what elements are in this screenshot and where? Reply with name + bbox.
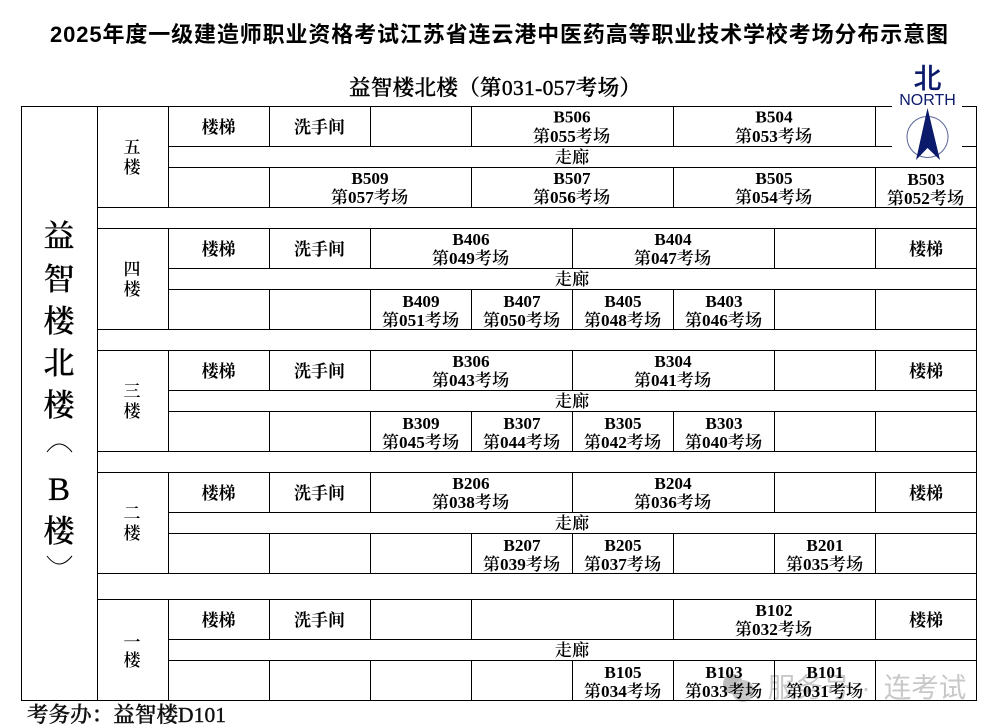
building name xyxy=(44,219,76,564)
room B307: 第044考场 xyxy=(483,433,560,452)
stairs: 楼梯 xyxy=(909,483,943,503)
room B101: B101 xyxy=(806,663,844,682)
panel: floor 2 xyxy=(98,472,976,574)
corridor: 走廊 xyxy=(555,641,589,660)
stairs: 楼梯 xyxy=(202,610,236,630)
building name: 楼 xyxy=(44,514,76,549)
room B304 xyxy=(634,352,711,390)
room B204: 第036考场 xyxy=(634,493,711,512)
room B309: 第045考场 xyxy=(382,433,459,452)
room B304: 第041考场 xyxy=(634,371,711,390)
floor label: 楼 xyxy=(124,650,142,670)
room B507: 第056考场 xyxy=(533,188,610,207)
room B303: B303 xyxy=(705,414,743,433)
room B305: B305 xyxy=(604,414,642,433)
panel: floor 1 xyxy=(98,600,976,701)
floor label xyxy=(124,504,142,543)
room B102 xyxy=(735,601,812,639)
corridor: 走廊 xyxy=(555,148,589,167)
building name: 智 xyxy=(44,262,74,297)
stairs: 楼梯 xyxy=(202,117,236,137)
stairs: 楼梯 xyxy=(202,361,236,381)
washroom: 洗手间 xyxy=(294,118,345,137)
stairs: 楼梯 xyxy=(909,610,943,630)
floor label xyxy=(124,138,142,177)
room B102: B102 xyxy=(755,601,793,620)
room B207: B207 xyxy=(503,536,541,555)
room B407: 第050考场 xyxy=(483,311,560,330)
panel: floor 3 xyxy=(98,350,976,452)
floor label: 二 xyxy=(124,504,140,523)
room B105 xyxy=(584,663,661,701)
building name: B xyxy=(48,472,70,508)
room B201: B201 xyxy=(806,536,844,555)
room B307 xyxy=(483,414,560,452)
room B307: B307 xyxy=(503,414,541,433)
room B409 xyxy=(382,292,459,330)
room B404: 第047考场 xyxy=(634,249,711,268)
room B406: 第049考场 xyxy=(432,249,509,268)
room B505: B505 xyxy=(755,169,793,188)
stairs: 楼梯 xyxy=(909,239,943,259)
room B103: 第033考场 xyxy=(685,682,762,701)
room B201 xyxy=(786,536,863,574)
floor label: 一 xyxy=(124,633,140,652)
room B509: 第057考场 xyxy=(331,188,408,207)
room B507: B507 xyxy=(553,169,591,188)
floor label: 楼 xyxy=(124,157,142,177)
room B509: B509 xyxy=(351,169,389,188)
room B206: 第038考场 xyxy=(432,493,509,512)
room B101: 第031考场 xyxy=(786,682,863,701)
stairs: 楼梯 xyxy=(202,483,236,503)
room B509 xyxy=(331,169,408,207)
room B506 xyxy=(533,108,610,146)
room B409: 第051考场 xyxy=(382,311,459,330)
washroom: 洗手间 xyxy=(294,611,345,630)
room B205 xyxy=(584,536,661,574)
room B406 xyxy=(432,230,509,268)
room B103 xyxy=(685,663,762,701)
room B407 xyxy=(483,292,560,330)
room B403: B403 xyxy=(705,292,743,311)
room B503 xyxy=(887,170,964,208)
room B506: 第055考场 xyxy=(533,127,610,146)
room B201: 第035考场 xyxy=(786,555,863,574)
room B405: B405 xyxy=(604,292,642,311)
room B204: B204 xyxy=(654,474,692,493)
room B102: 第032考场 xyxy=(735,620,812,639)
watermark xyxy=(723,672,966,703)
room B403 xyxy=(685,292,762,330)
room B504: B504 xyxy=(755,108,793,126)
room B303 xyxy=(685,414,762,452)
room B103: B103 xyxy=(705,663,743,682)
room B305 xyxy=(584,414,661,452)
room B304: B304 xyxy=(654,352,692,371)
corridor: 走廊 xyxy=(555,514,589,533)
room B105: 第034考场 xyxy=(584,682,661,701)
corridor: 走廊 xyxy=(555,270,589,289)
room B306: B306 xyxy=(452,352,490,371)
room B206: B206 xyxy=(452,474,490,493)
building name: 楼 xyxy=(44,304,76,339)
floor label xyxy=(124,382,142,421)
title: 2025年度一级建造师职业资格考试江苏省连云港中医药高等职业技术学校考场分布示意图 xyxy=(50,22,948,47)
room B503: B503 xyxy=(907,170,945,189)
room B407: B407 xyxy=(503,292,541,311)
icon: north compass: 北 xyxy=(913,63,942,94)
building name: 北 xyxy=(44,346,74,381)
room B505 xyxy=(735,169,812,207)
washroom: 洗手间 xyxy=(294,362,345,381)
room B306: 第043考场 xyxy=(432,371,509,390)
room B105: B105 xyxy=(604,663,642,682)
room B207 xyxy=(483,536,560,574)
office note: 考务办：益智楼D101 xyxy=(27,703,226,727)
room B309: B309 xyxy=(402,414,440,433)
building name: 益 xyxy=(44,219,74,254)
room B406: B406 xyxy=(452,230,490,249)
room B204 xyxy=(634,474,711,512)
panel: floor 5 xyxy=(98,106,976,208)
watermark: 连考试 xyxy=(884,672,966,703)
room B505: 第054考场 xyxy=(735,188,812,207)
room B303: 第040考场 xyxy=(685,433,762,452)
room B409: B409 xyxy=(402,292,440,311)
room B205: B205 xyxy=(604,536,642,555)
room B503: 第052考场 xyxy=(887,189,964,208)
subtitle: 益智楼北楼（第031-057考场） xyxy=(349,76,641,100)
room B504 xyxy=(735,108,812,146)
floor label: 楼 xyxy=(124,523,142,543)
room B101 xyxy=(786,663,863,701)
room B305: 第042考场 xyxy=(584,433,661,452)
building name: 楼 xyxy=(44,388,76,423)
icon: north compass xyxy=(892,60,962,166)
icon: north compass: NORTH xyxy=(899,92,956,109)
room B207: 第039考场 xyxy=(483,555,560,574)
stairs: 楼梯 xyxy=(202,239,236,259)
corridor: 走廊 xyxy=(555,392,589,411)
floor label: 四 xyxy=(124,260,140,279)
washroom: 洗手间 xyxy=(294,484,345,503)
panel: floor 4 xyxy=(98,228,976,330)
panel: building column xyxy=(22,106,976,700)
room B404 xyxy=(634,230,711,268)
watermark: 服务号 xyxy=(768,672,850,703)
room B309 xyxy=(382,414,459,452)
stairs: 楼梯 xyxy=(909,361,943,381)
room B306 xyxy=(432,352,509,390)
room B507 xyxy=(533,169,610,207)
floor label: 三 xyxy=(124,382,140,401)
floor label: 楼 xyxy=(124,279,142,299)
room B404: B404 xyxy=(654,230,692,249)
floor label: 楼 xyxy=(124,401,142,421)
room B403: 第046考场 xyxy=(685,311,762,330)
floor label xyxy=(124,260,142,299)
room B205: 第037考场 xyxy=(584,555,661,574)
room B405: 第048考场 xyxy=(584,311,661,330)
floor label: 五 xyxy=(124,138,140,157)
watermark: · xyxy=(861,672,871,703)
room B506: B506 xyxy=(553,108,591,126)
room B405 xyxy=(584,292,661,330)
floor label xyxy=(124,633,142,670)
washroom: 洗手间 xyxy=(294,240,345,259)
room B504: 第053考场 xyxy=(735,127,812,146)
room B206 xyxy=(432,474,509,512)
